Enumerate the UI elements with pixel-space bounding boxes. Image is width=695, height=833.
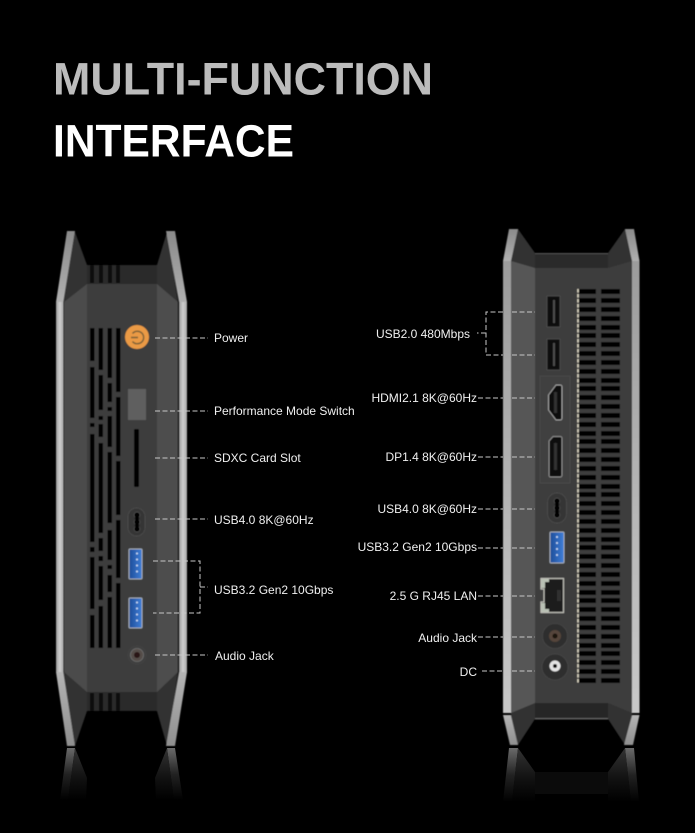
callout: USB2.0 bracket	[376, 312, 535, 355]
callout: Power	[155, 331, 248, 345]
callout: Audio Jack left: Audio Jack	[215, 649, 275, 663]
USB2.0 port lower	[547, 339, 560, 370]
callout: Power: Power	[214, 331, 248, 345]
body shell	[511, 229, 632, 745]
callout: HDMI: HDMI2.1 8K@60Hz	[371, 391, 477, 405]
callout: USB4.0 right: USB4.0 8K@60Hz	[377, 502, 477, 516]
title	[53, 54, 433, 166]
side vent slots	[90, 328, 120, 648]
callout: USB3.2 bracket: USB3.2 Gen2 10Gbps	[214, 583, 333, 597]
icon: power button	[125, 325, 149, 349]
silver edges	[56, 302, 64, 672]
callout: DC: DC	[460, 665, 477, 679]
top and bottom vents	[90, 265, 120, 711]
USB2.0 port upper	[547, 296, 560, 327]
body shell	[64, 232, 178, 746]
vent grille	[579, 289, 620, 683]
callout: USB3.2 right: USB3.2 Gen2 10Gbps	[358, 540, 477, 554]
callout: Performance Mode Switch: Performance Mode Switch	[214, 404, 355, 418]
RJ45 LAN port	[541, 578, 564, 612]
callout: Audio Jack right	[418, 631, 535, 645]
callout: USB4.0: USB4.0 8K@60Hz	[214, 513, 314, 527]
silver edges	[503, 261, 511, 713]
USB3.2 port upper	[129, 549, 142, 579]
audio jack	[127, 645, 147, 665]
HDMI port	[548, 385, 562, 420]
callout: USB2.0 bracket: USB2.0 480Mbps	[376, 327, 470, 341]
reflection: left device	[60, 748, 183, 800]
left device: side view	[56, 231, 187, 746]
callout: Audio Jack right: Audio Jack	[418, 631, 478, 645]
audio jack	[542, 624, 568, 648]
center panel	[87, 284, 157, 692]
callout: DP: DP1.4 8K@60Hz	[385, 450, 477, 464]
title: MULTI-FUNCTION	[53, 54, 433, 104]
USB3.2 port lower	[129, 598, 142, 628]
USB4 port	[548, 493, 566, 523]
callout: DC	[460, 665, 535, 679]
side panels	[64, 284, 87, 692]
performance mode switch	[128, 389, 146, 420]
reflection: right device	[503, 748, 639, 802]
USB4 port	[128, 508, 145, 536]
callout: Audio Jack left	[155, 649, 275, 663]
video port recess	[540, 376, 570, 483]
callout: USB3.2 bracket	[153, 561, 333, 613]
callout: LAN: 2.5 G RJ45 LAN	[390, 589, 477, 603]
callout: SDXC Card Slot: SDXC Card Slot	[214, 451, 301, 465]
DisplayPort	[549, 436, 562, 477]
DC jack	[542, 654, 568, 680]
SDXC card slot	[134, 429, 139, 487]
USB3.2 port	[550, 532, 564, 563]
right device: rear view	[503, 229, 640, 745]
title: INTERFACE	[53, 116, 294, 166]
